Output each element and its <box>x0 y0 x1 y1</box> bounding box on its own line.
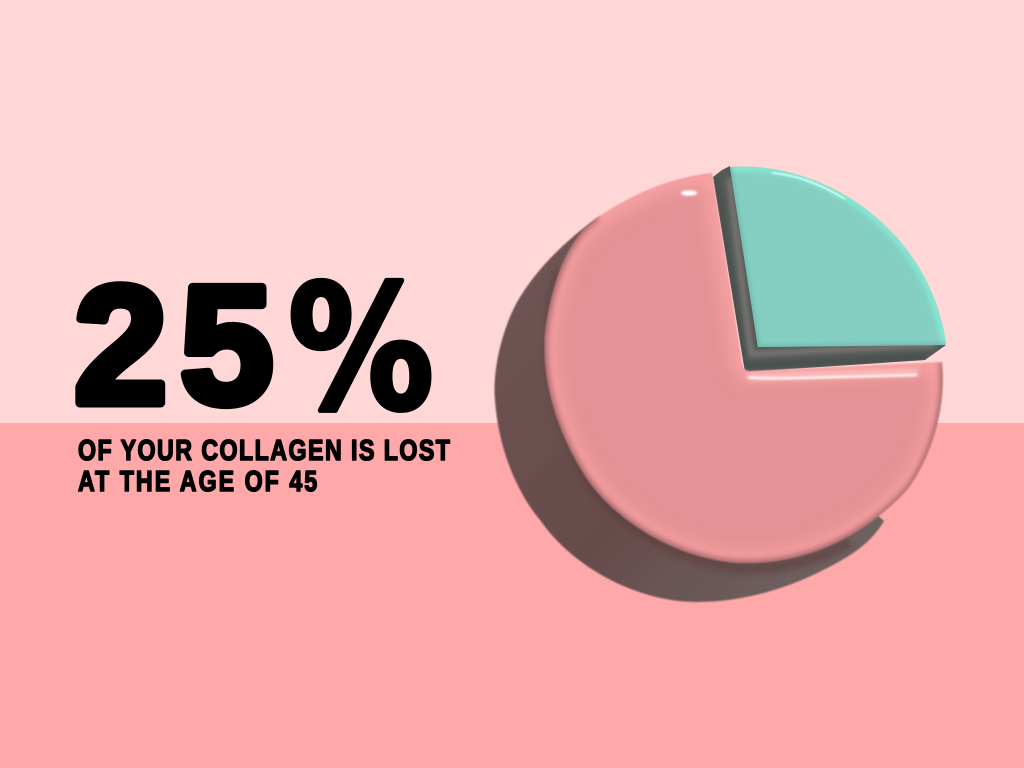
background: lower pink band <box>0 423 1024 768</box>
teal slice 25% <box>730 166 946 347</box>
glossy highlight on teal edge <box>772 173 845 199</box>
caption: of your collagen is lost at the age of 45: AT THE AGE OF 45 <box>78 464 317 498</box>
contact shadow hugging the pink slice <box>550 270 850 568</box>
glossy highlight along pink notch <box>748 375 917 378</box>
headline: 25% <box>74 248 434 449</box>
headline: 25%: 2 <box>74 251 167 439</box>
background: upper light pink band <box>0 0 1024 423</box>
soft halo along pink notch <box>748 372 918 377</box>
glossy highlight on pink top <box>681 190 697 196</box>
caption: of your collagen is lost at the age of 45 <box>78 433 450 498</box>
caption: of your collagen is lost at the age of 45: OF YOUR COLLAGEN IS LOST <box>78 433 450 467</box>
3D pie chart <box>495 155 955 602</box>
pink slice 75% <box>535 165 955 575</box>
infographic canvas <box>0 166 1024 768</box>
headline: 25%: 5 <box>180 251 273 439</box>
teal slice side walls <box>713 166 946 372</box>
pie cast shadow <box>495 216 884 602</box>
dark soft rim along lower edge <box>544 218 943 563</box>
headline: 25%: % <box>288 248 434 449</box>
